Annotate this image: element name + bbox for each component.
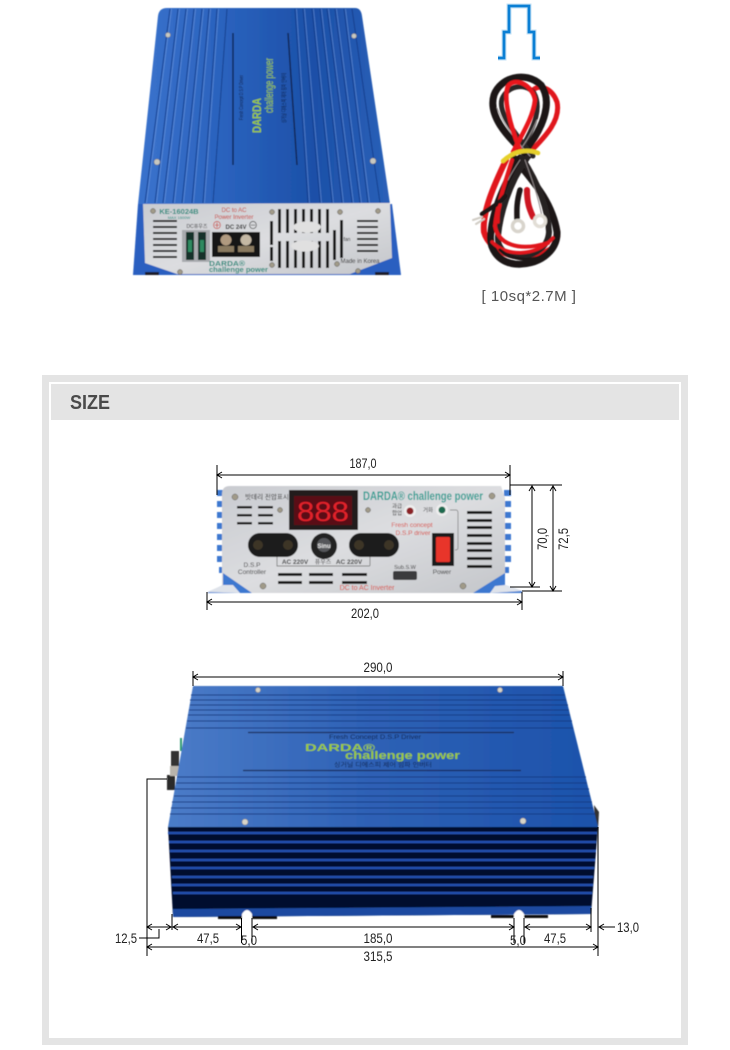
dimension lines: front view: [207, 465, 562, 610]
product photo: inverter top view: ⊖: [248, 221, 258, 232]
red captions: Fresh concept: [391, 522, 433, 529]
icon: square wave output: [498, 6, 540, 58]
side feet and blue body: [133, 204, 401, 275]
feet: [218, 916, 277, 919]
fan and origin labels: fan: [344, 237, 351, 243]
dimension labels: side view: 12,5: [115, 930, 137, 946]
black top loops: [493, 77, 546, 156]
front view photo: 퓨우즈: [315, 559, 332, 566]
product photo: inverter top view: Power Inverter: [214, 215, 254, 221]
product photo: inverter top view: MAX 1600W: [168, 215, 190, 220]
dimension labels: front view: 70,0: [534, 528, 550, 550]
dimension labels: side view: 185,0: [364, 930, 393, 946]
fuse: [311, 533, 337, 559]
front view photo: 합업: [392, 509, 402, 517]
cable caption: [ 10sq*2.7M ]: [482, 288, 576, 305]
rotated branding: Fresh Concept D.S.P Driver: [239, 75, 245, 120]
product photo: inverter top view: 싱거닐 디에스피 제어 힘파 인버터: [280, 73, 288, 123]
side view photo: [167, 686, 599, 922]
front view photo: Sinu: [318, 544, 331, 550]
lower red outer strand: [484, 160, 557, 257]
front view photo: 거화: [423, 506, 433, 514]
dimension lines: side view: [139, 671, 615, 956]
screws: [232, 493, 495, 589]
product photo: inverter top view: DC 24V: [225, 225, 247, 231]
header band: [51, 384, 679, 420]
product photo: inverter top view: DC to AC: [221, 208, 247, 214]
product photo: inverter top view: DARDA: [250, 98, 264, 133]
product photo: inverter top view: challenge power: [262, 58, 276, 113]
dimension labels: front view: [350, 455, 571, 621]
panel screws: [150, 208, 380, 274]
dimension labels: side view: 5,0: [510, 932, 526, 948]
side fins: [217, 490, 511, 573]
yellow cable tie: [503, 151, 538, 161]
mounting notches: [242, 910, 252, 922]
LED display: [289, 490, 358, 530]
right vent: [357, 220, 378, 252]
inset slots: [248, 732, 514, 734]
labels: D.S.P: [244, 562, 260, 569]
front view photo: AC 220V: [282, 559, 309, 566]
front view photo: 888: [297, 496, 349, 527]
dimension labels: side view: 13,0: [617, 919, 639, 935]
panel: size: [42, 375, 688, 1045]
DC terminal block: ⊕: [212, 221, 222, 232]
heat sink fins: [168, 827, 598, 917]
heat sink ridges: [145, 9, 380, 203]
heading: SIZE: [70, 392, 110, 414]
front view photo: AC 220V: [336, 559, 363, 566]
dimension labels: side view: [115, 659, 639, 964]
fan grill: [270, 209, 343, 268]
sub switch: Sub.S.W: [394, 565, 417, 571]
dimension labels: side view: 5,0: [241, 932, 257, 948]
dimension labels: side view: 47,5: [197, 930, 219, 946]
side view photo: challenge power: [345, 750, 461, 762]
AC sockets: [248, 533, 298, 557]
DC fuses: DC퓨우즈: [186, 224, 208, 230]
model text: KE-16024B: [159, 207, 199, 216]
front view photo: D.S.P driver: [396, 530, 431, 537]
vents: [237, 506, 492, 584]
dimension labels: front view: 72,5: [555, 528, 571, 550]
silver front panel: [143, 203, 392, 274]
socket bracket: [277, 557, 370, 566]
front view photo: [207, 486, 522, 593]
blue feet: [207, 573, 252, 593]
front view photo: 과급: [392, 502, 402, 510]
product photo: inverter top view: [133, 8, 401, 275]
front view photo: Power: [433, 569, 452, 576]
lower black bundle: [490, 158, 557, 264]
dimension labels: side view: 315,5: [364, 948, 393, 964]
product photo: inverter top view: Made in Korea: [340, 259, 380, 265]
lower front red strands: [495, 160, 548, 247]
grey highlight strands: [497, 108, 537, 156]
power switch: [432, 533, 454, 566]
lamp wire: [450, 510, 458, 550]
dimension labels: side view: 290,0: [364, 659, 393, 675]
brand text: DARDA®: [209, 259, 246, 268]
branding: Fresh Concept D.S.P Driver: [329, 735, 421, 741]
terminal leads: [482, 196, 505, 214]
dimension labels: front view: 187,0: [350, 455, 377, 471]
indicator lamps: [404, 505, 416, 517]
dimension labels: side view: 47,5: [544, 930, 566, 946]
rear terminals: [167, 775, 175, 790]
front view photo: Controller: [238, 569, 267, 576]
back red loop: [530, 87, 558, 152]
left vent: [153, 220, 177, 258]
panel frame: [42, 375, 688, 1045]
photo: power cables: [473, 77, 558, 264]
bottom caption: DC to AC Inverter: [340, 585, 395, 592]
top plate: [168, 686, 598, 827]
product photo: inverter top view: challenge power: [209, 267, 268, 274]
ridge lines: [170, 695, 595, 814]
brand: DARDA® challenge power: [363, 489, 483, 503]
top face screws: [154, 32, 376, 165]
top face: [138, 8, 390, 204]
dimension labels: front view: 202,0: [351, 605, 379, 621]
voltage label: 밧데리 전압표시: [245, 492, 289, 501]
ring terminals: [512, 220, 524, 232]
side view photo: 싱거닐 디에스피 제어 힘파 인버터: [334, 761, 432, 769]
slots: [232, 33, 234, 165]
side view photo: DARDA®: [305, 743, 376, 754]
red inner loop: [506, 82, 535, 152]
screws: [242, 688, 526, 825]
silver panel: [222, 486, 505, 593]
